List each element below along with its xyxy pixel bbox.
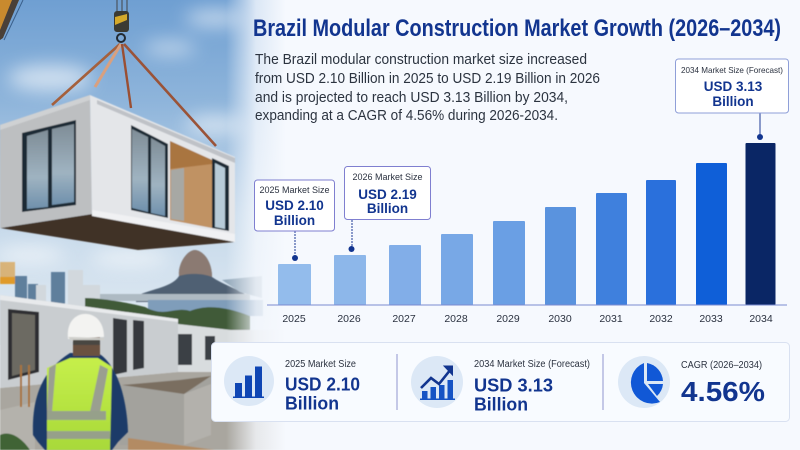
year labels: 2028 [444,313,468,325]
stat: CAGR [681,360,765,407]
year labels: 2033 [699,313,723,325]
icon: bar chart [224,356,274,406]
callout: 2026 market size [344,166,430,252]
photo: suspended modular unit [0,95,235,250]
stat: 2025 market size [285,359,360,414]
stat: 2025 market size: USD 2.10 [285,374,360,394]
callout: 2026 market size: 2026 Market Size [352,172,423,182]
bars [278,143,776,305]
year labels: 2029 [496,313,520,325]
photo: crane and straps [0,0,216,146]
stat: CAGR: CAGR (2026–2034) [681,360,762,371]
intro text block [255,52,600,124]
callout: 2026 market size: Billion [367,201,408,216]
callout: 2026 market size: USD 2.19 [358,187,417,202]
callout: 2025 market size: 2025 Market Size [259,185,330,195]
year labels: 2026 [337,313,361,325]
callout: 2034 market size forecast [676,59,788,140]
intro text block: expanding at a CAGR of 4.56% during 2026-2034. [255,108,558,124]
stat: 2034 market size forecast: USD 3.13 [474,376,553,396]
callout: 2034 market size forecast: 2034 Market Size (Forecast) [681,65,783,75]
year labels: 2034 [749,313,773,325]
year labels: 2031 [599,313,623,325]
stat: 2034 market size forecast: 2034 Market Size (Forecast) [474,359,590,370]
stat: 2025 market size: Billion [285,394,339,414]
year labels: 2032 [649,313,673,325]
stat: CAGR: 4.56% [681,376,765,407]
year labels: 2027 [392,313,416,325]
intro text block: from USD 2.10 Billion in 2025 to USD 2.19 Billion in 2026 [255,71,600,87]
intro text block: and is projected to reach USD 3.13 Billion by 2034, [255,90,568,106]
year labels: 2030 [548,313,572,325]
stat: 2034 market size forecast: Billion [474,394,528,414]
callout: 2034 market size forecast: USD 3.13 [704,79,763,94]
callout: 2025 market size: Billion [274,213,315,228]
stat: 2034 market size forecast [474,359,590,414]
photo: site worker [33,314,128,450]
callout: 2034 market size forecast: Billion [712,94,754,109]
callout: 2025 market size: USD 2.10 [265,198,324,213]
intro text block: The Brazil modular construction market size increased [255,52,587,68]
year labels: 2025 [282,313,306,325]
icon: growth chart with arrow [411,356,463,408]
summary panel [212,342,790,422]
photo: scenic backdrop [0,0,292,450]
bar chart [267,143,787,325]
icon: pie chart [618,356,670,408]
year labels [282,313,773,325]
callout: 2025 market size [254,180,334,261]
stat: 2025 market size: 2025 Market Size [285,359,356,370]
